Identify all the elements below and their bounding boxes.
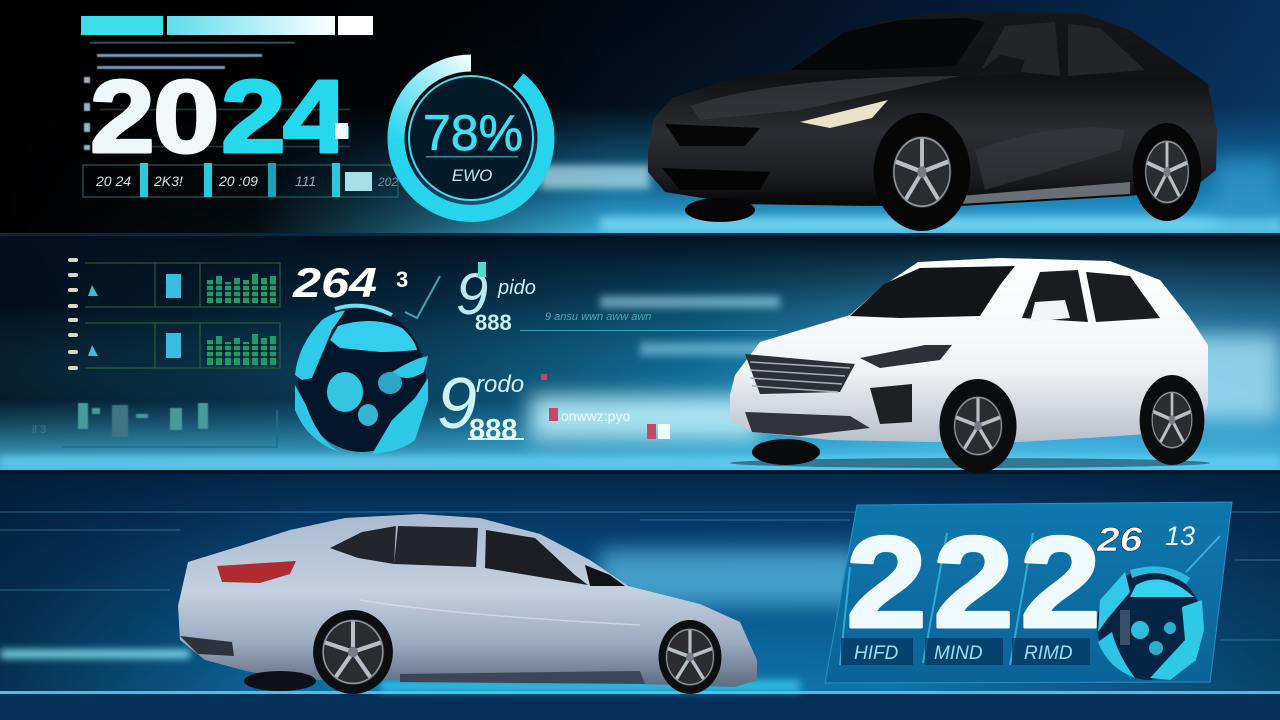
body sheen xyxy=(690,76,960,120)
data cells row: 202 xyxy=(377,175,398,189)
data table rows xyxy=(85,263,280,368)
column dividers xyxy=(840,533,1033,665)
upper label block: 9 xyxy=(456,262,488,327)
lower bracket panel xyxy=(62,410,277,447)
panel: bottom-right stats xyxy=(825,502,1232,683)
upper label block: 888 xyxy=(475,310,512,335)
headlight and grille xyxy=(800,100,888,128)
background: top band xyxy=(0,0,1280,236)
year 2024: 2 xyxy=(90,60,155,174)
label 2643 with check line xyxy=(292,259,440,318)
windows xyxy=(850,266,1015,318)
panel: middle-left dashboard: il 3 xyxy=(32,424,46,436)
lower label block: rodo xyxy=(476,371,524,398)
year 2024 xyxy=(90,59,348,174)
tail light xyxy=(217,561,296,583)
corner year xyxy=(1096,520,1220,572)
icon: segmented cyan globe (middle) xyxy=(295,306,428,454)
header bar xyxy=(81,16,373,35)
data cells row: 111 xyxy=(295,173,316,189)
upper label block: pido xyxy=(497,277,536,299)
panel: top-left 2024 dashboard xyxy=(81,16,398,197)
small caption lines xyxy=(84,42,350,150)
background: middle band xyxy=(0,236,1280,470)
data cells row xyxy=(83,163,398,197)
headlight and grille xyxy=(860,345,952,368)
big digits: 2 xyxy=(1020,510,1101,655)
lower label block xyxy=(437,364,670,446)
upper label block xyxy=(456,262,778,335)
wheels xyxy=(685,198,755,222)
background: bottom band xyxy=(0,470,1280,720)
stat labels: MIND xyxy=(934,643,983,664)
lower label block: 888 xyxy=(469,414,517,446)
lower label block: 9 xyxy=(437,364,477,444)
wheels xyxy=(244,671,316,691)
corner year: 13 xyxy=(1165,521,1195,551)
stat labels xyxy=(841,638,1090,665)
wheels xyxy=(752,439,820,465)
label 2643 with check line: 264 xyxy=(292,259,377,306)
year 2024: 0 xyxy=(153,59,219,174)
car: silver sedan xyxy=(178,514,757,694)
data cells row: 20 24 xyxy=(95,173,131,189)
panel: middle-left dashboard xyxy=(32,258,280,447)
glitch text blocks: middle centre xyxy=(437,262,778,446)
stat labels: RIMD xyxy=(1024,643,1073,664)
windows xyxy=(790,18,985,70)
donut gauge 78%: EWO xyxy=(452,166,492,185)
big digits xyxy=(846,510,1101,655)
big digits: 2 xyxy=(933,510,1014,655)
year 2024: 2 xyxy=(221,60,286,174)
upper label block: 9 ansu wwn aww awn xyxy=(545,311,651,323)
donut gauge 78% xyxy=(396,63,546,213)
icon: segmented cyan globe (small) xyxy=(1097,566,1204,680)
lower label block: onwwz:pyo xyxy=(561,408,630,424)
donut gauge 78%: 78% xyxy=(423,105,523,161)
label 2643 with check line: 3 xyxy=(396,267,408,292)
data cells row: 2K3! xyxy=(153,173,183,189)
stat labels: HIFD xyxy=(854,643,899,664)
data cells row: 20 :09 xyxy=(218,173,258,189)
mini bar grids xyxy=(207,274,276,365)
big digits: 2 xyxy=(846,510,927,655)
corner year: 26 xyxy=(1096,520,1144,558)
windows xyxy=(330,526,478,567)
year 2024: 4 xyxy=(283,60,348,174)
car: white SUV xyxy=(730,258,1210,473)
car: black sedan xyxy=(648,11,1217,231)
